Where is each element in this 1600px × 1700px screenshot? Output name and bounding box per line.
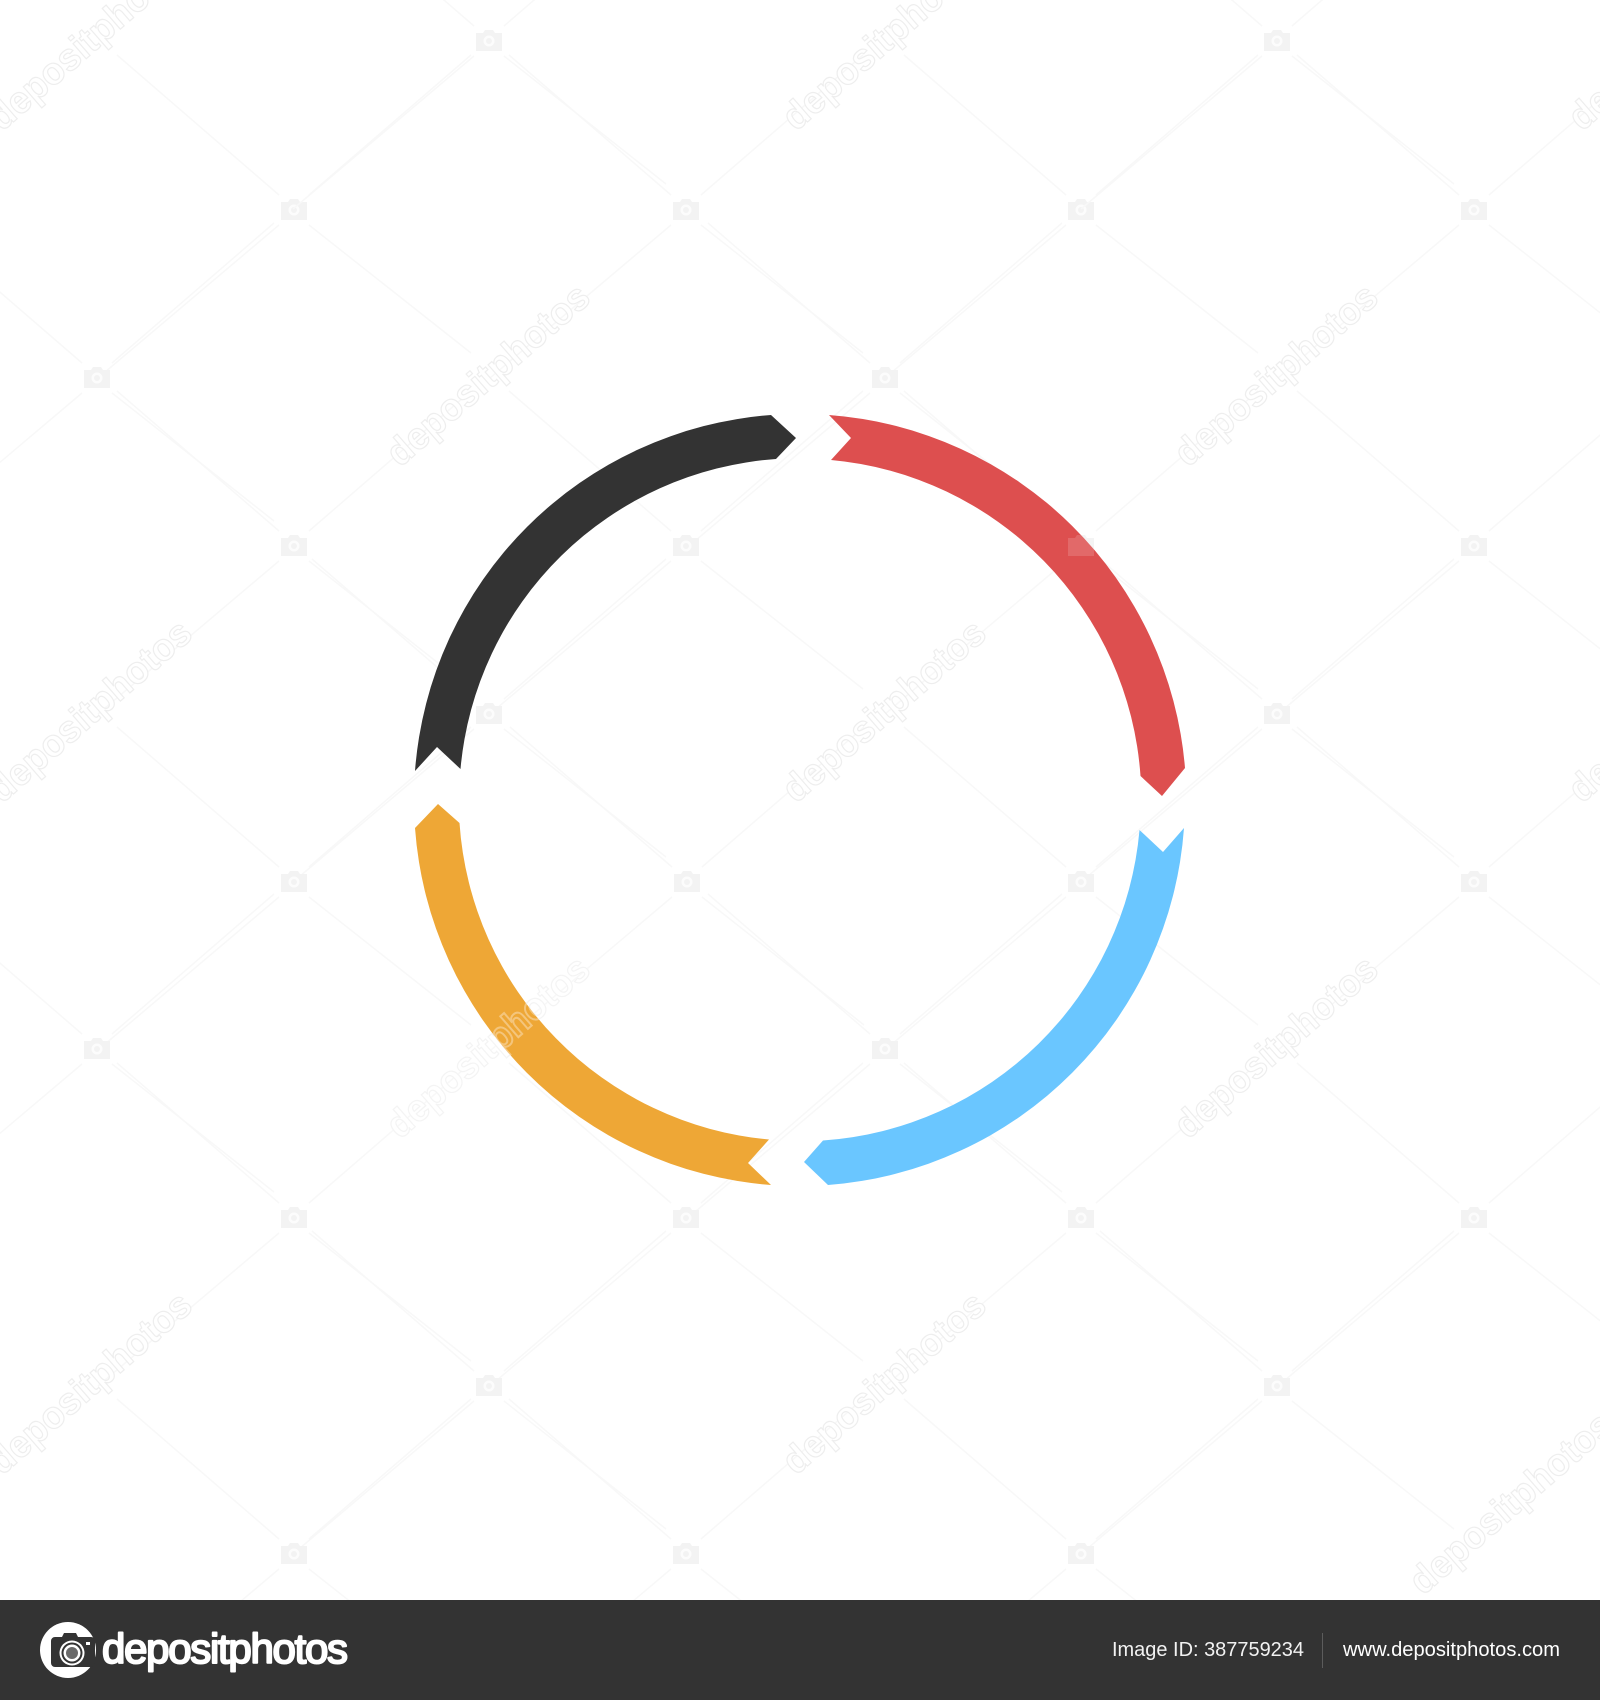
watermark text: depositphotos [1166, 948, 1386, 1147]
watermark text: depositphotos [774, 612, 994, 811]
circular arrow diagram [415, 415, 1185, 1185]
logo wordmark: depositphotos [102, 1625, 348, 1672]
website url: www.depositphotos.com [1342, 1639, 1560, 1661]
image id: Image ID: 387759234 [1112, 1639, 1304, 1661]
watermark overlay on orange segment: depositphotos [378, 948, 598, 1147]
watermark text: depositphotos [1166, 276, 1386, 475]
watermark camera overlay on red segment [1068, 535, 1094, 556]
watermark text: depositphotos [378, 948, 598, 1147]
watermark text: depositphotos [378, 276, 598, 475]
arrow segment: black (top left) [415, 415, 796, 771]
footer bar [0, 1600, 1600, 1700]
arrow segment: red (top right) [829, 415, 1185, 796]
watermark text: depositphotos [774, 1284, 994, 1483]
arrow segment: blue (bottom right) [804, 828, 1184, 1185]
arrow segment: orange (bottom left) [415, 804, 771, 1185]
icon: camera logo [40, 1622, 96, 1678]
